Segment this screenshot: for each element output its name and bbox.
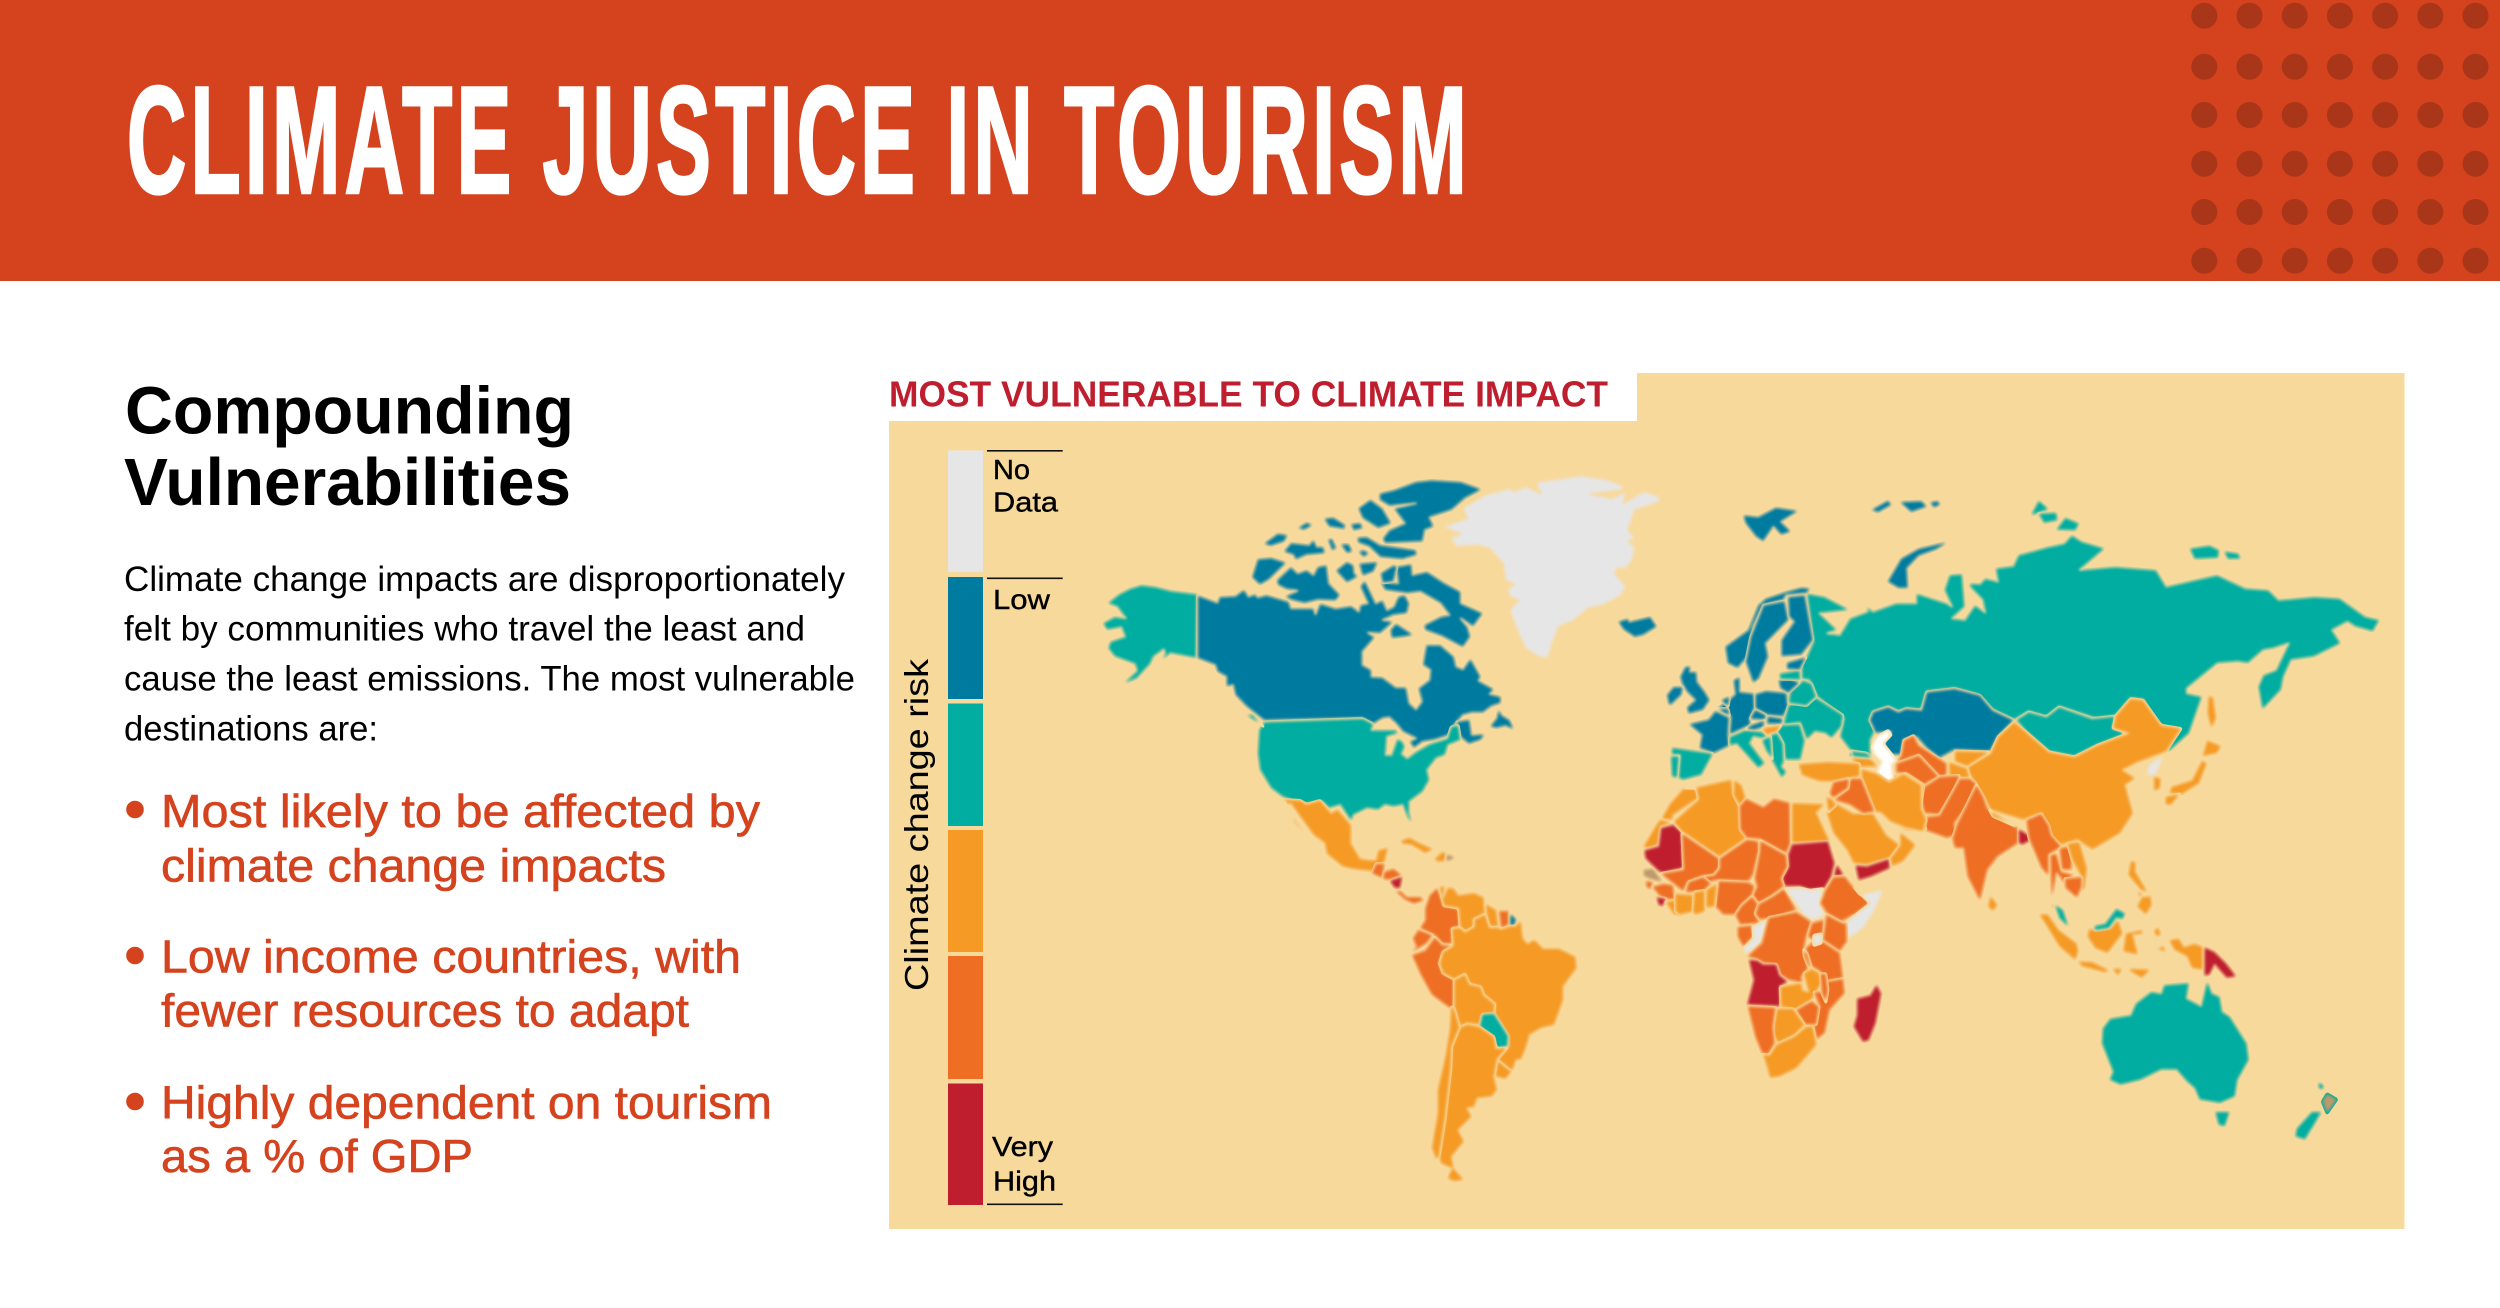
legend: climate change risk scale: High [993,1166,1056,1196]
left column text [124,374,855,1182]
decorative dot grid [2191,3,2488,274]
map: North America and Greenland [1103,476,1659,828]
map: Europe [1667,657,1897,782]
map: Africa and Middle East [1643,762,1927,1078]
heading: Vulnerabilities [124,445,571,520]
intro paragraph [124,559,855,748]
bullet: dependent on tourism: as a % of GDP [161,1130,473,1182]
header banner [0,0,2500,281]
bullet: low income countries: Low income countries, with [161,930,741,982]
map: Southeast Asia and Oceania [2039,861,2337,1140]
bullet: low income countries [126,930,741,1036]
map: Asia and Russia [1725,500,2380,928]
legend: climate change risk scale: Data [993,486,1058,518]
bullet: most likely affected: climate change impacts [161,840,666,892]
bullet: dependent on tourism: Highly dependent on tourism [161,1076,772,1128]
intro paragraph: destinations are: [124,708,378,748]
intro paragraph: cause the least emissions. The most vulnerable [124,658,855,698]
legend axis label: Climate change risk [898,658,935,991]
map: Latin America [1283,799,1577,1182]
heading: Compounding [125,374,574,448]
bullet: dependent on tourism [126,1076,772,1182]
bullet: low income countries: fewer resources to adapt [161,984,689,1036]
legend: climate change risk scale: Very [992,1131,1053,1162]
bullet: most likely affected [126,785,760,892]
map title tab: MOST VULNERABLE TO CLIMATE IMPACT [889,374,1608,414]
panel: world map [889,373,2404,1229]
intro paragraph: felt by communities who travel the least and [124,608,805,648]
legend: climate change risk scale: No [993,454,1030,485]
bullet: most likely affected: Most likely to be affected by [161,785,760,837]
legend: climate change risk scale [898,450,1063,1205]
legend: climate change risk scale: Low [993,584,1051,615]
heading [124,374,574,520]
intro paragraph: Climate change impacts are disproportionately [124,559,845,599]
